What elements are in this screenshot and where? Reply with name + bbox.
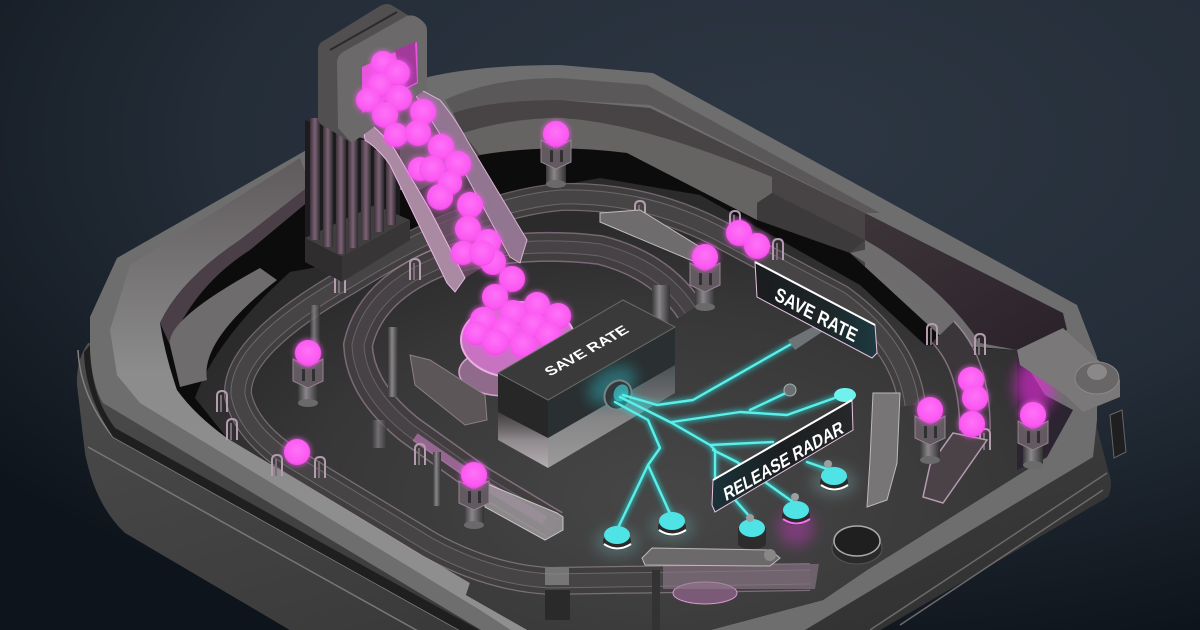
bottom flipper assembly <box>545 548 819 630</box>
track clips <box>217 201 990 478</box>
release radar sign <box>712 400 853 512</box>
outer glass track <box>238 197 912 581</box>
port on box <box>599 376 637 414</box>
rim light band <box>110 158 540 630</box>
metal posts <box>310 285 670 506</box>
bowl <box>459 302 575 396</box>
chute floor <box>362 83 527 278</box>
interior cavity <box>160 148 1047 630</box>
rim back steps <box>445 78 880 330</box>
curved metal bracket <box>410 355 487 425</box>
sign text: SAVE RATE <box>772 283 860 347</box>
right curved ramp <box>850 247 980 353</box>
emitter pin <box>788 324 822 350</box>
inner glass track <box>358 247 690 525</box>
upper left flipper <box>600 210 700 262</box>
chute right rail <box>408 83 527 263</box>
hinge block with knob <box>1017 328 1126 458</box>
right inner wall <box>865 213 1067 350</box>
save rate sign <box>755 262 877 358</box>
right exit chute <box>923 433 987 503</box>
cyan glow lines <box>615 343 843 530</box>
cyan nodes <box>595 384 856 556</box>
rim step block <box>757 193 865 290</box>
single pink balls <box>284 121 1046 488</box>
left mauve inner wall <box>160 185 310 345</box>
tower pillars <box>310 118 396 254</box>
right wall magenta glow <box>1015 350 1073 470</box>
tower back shadow <box>305 120 400 257</box>
pink balls in chute and bowl <box>356 51 571 358</box>
box label text: SAVE RATE <box>541 323 633 379</box>
second right track <box>943 332 975 430</box>
chute end <box>485 483 563 540</box>
playfield floor <box>195 178 1047 630</box>
posts with pink balls <box>293 132 1048 529</box>
outer rim <box>90 65 1097 630</box>
flipper right <box>867 393 900 507</box>
tower head <box>318 4 427 143</box>
disc button <box>832 526 882 564</box>
pinball machine base body <box>77 343 1111 630</box>
sign text: RELEASE RADAR <box>722 416 846 506</box>
chute left rail <box>362 117 465 292</box>
left curved ramp <box>170 268 277 387</box>
tower base block <box>305 205 410 282</box>
save rate box <box>498 300 675 468</box>
